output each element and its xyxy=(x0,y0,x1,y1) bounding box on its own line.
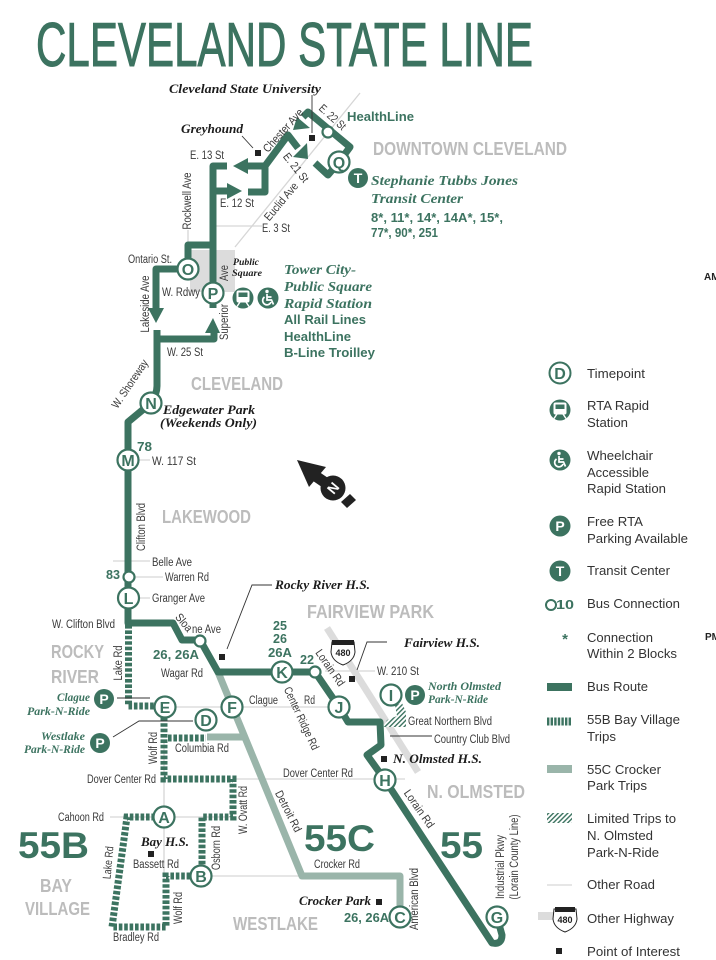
legend: timepoint xyxy=(550,362,645,384)
legend: parking: Parking Available xyxy=(587,531,688,546)
timepoint stops: O xyxy=(182,262,194,279)
downtown labels: E. 12 St xyxy=(220,198,255,210)
legend: 55B trips: 55B Bay Village xyxy=(587,712,680,727)
west side road labels: Wolf Rd xyxy=(148,732,160,764)
west side road labels: Park-N-Ride xyxy=(24,742,86,756)
east side road labels: Lorain Rd xyxy=(312,648,346,689)
timepoint stops: F xyxy=(227,700,237,717)
Tower City rapid station text: B-Line Troilley xyxy=(284,346,375,360)
north arrow: N xyxy=(324,479,342,497)
downtown labels: Ave xyxy=(219,265,231,281)
legend: connection within 2 blocks xyxy=(562,630,677,661)
legend: 55B trips xyxy=(547,712,680,744)
route numbers: 55B xyxy=(18,825,89,866)
east side road labels: Industrial Pkwy xyxy=(495,835,507,899)
bus connection circles xyxy=(124,126,334,678)
east side road labels: North Olmsted xyxy=(427,679,502,693)
east side road labels xyxy=(268,619,521,930)
legend: RTA rapid station: Station xyxy=(587,415,628,430)
Stephanie Tubbs Jones transit center text: Transit Center xyxy=(371,191,464,206)
downtown labels: DOWNTOWN CLEVELAND xyxy=(373,138,567,159)
downtown labels: Rockwell Ave xyxy=(182,172,194,230)
east side road labels: 25 xyxy=(273,619,287,633)
east side road labels: 22 xyxy=(300,653,314,667)
legend: limited trips xyxy=(547,811,676,860)
icon: parking Westlake xyxy=(90,733,110,753)
downtown labels xyxy=(110,82,567,411)
legend: parking xyxy=(550,514,688,546)
legend: connection within 2 blocks: Within 2 Blocks xyxy=(587,646,677,661)
legend: connection within 2 blocks: * xyxy=(562,631,568,648)
mid corridor labels: 78 xyxy=(137,440,152,454)
west side road labels: Lake Rd xyxy=(102,846,116,880)
timepoint stops: I xyxy=(389,688,393,705)
community names: VILLAGE xyxy=(25,898,90,919)
legend: limited trips: N. Olmsted xyxy=(587,828,653,843)
east side road labels: Country Club Blvd xyxy=(434,734,510,746)
legend: other road: Other Road xyxy=(587,877,655,892)
interstate 480 shield xyxy=(331,640,355,665)
legend: bus route xyxy=(547,679,648,694)
downtown labels: Superior xyxy=(219,304,231,340)
legend: other highway: Other Highway xyxy=(587,911,675,926)
route 55C Crocker Park trips xyxy=(207,672,400,917)
timepoint stops: P xyxy=(208,286,219,303)
community names: LAKEWOOD xyxy=(162,506,251,527)
legend xyxy=(538,362,688,959)
timepoint stops: C xyxy=(394,910,406,927)
mid corridor labels: Edgewater Park xyxy=(162,403,256,417)
west side road labels: W. Ovatt Rd xyxy=(238,786,250,834)
timepoint stops xyxy=(118,152,508,928)
background roads and highway xyxy=(110,93,418,880)
west side road labels: Columbia Rd xyxy=(175,743,229,755)
Stephanie Tubbs Jones transit center text xyxy=(371,173,518,240)
legend: wheelchair accessible: Wheelchair xyxy=(587,448,654,463)
timepoint stops: D xyxy=(200,713,212,730)
timepoint stops: H xyxy=(379,773,391,790)
legend: limited trips: Limited Trips to xyxy=(587,811,676,826)
east side road labels: N. Olmsted H.S. xyxy=(392,752,482,766)
west side road labels: Park-N-Ride xyxy=(27,704,91,718)
timepoint stops: E xyxy=(160,700,171,717)
east side road labels: Park-N-Ride xyxy=(428,692,489,706)
downtown labels: W. Shoreway xyxy=(110,358,151,411)
icon: parking I xyxy=(405,685,425,705)
community names: WESTLAKE xyxy=(233,913,318,934)
Tower City rapid station text xyxy=(283,263,375,360)
route numbers: 55 xyxy=(440,825,483,866)
legend: wheelchair accessible: Rapid Station xyxy=(587,481,666,496)
west side road labels: Clague xyxy=(57,690,91,704)
west side road labels: Clague xyxy=(249,695,278,707)
east side road labels: (Lorain County Line) xyxy=(509,814,521,900)
legend: other road xyxy=(547,877,655,892)
icon: rapid station xyxy=(232,288,254,308)
downtown labels: W. Rdwy xyxy=(162,287,200,299)
downtown labels: E. 13 St xyxy=(190,150,225,162)
Tower City rapid station text: Tower City- xyxy=(284,263,356,278)
west side road labels: Bradley Rd xyxy=(113,932,159,944)
Tower City rapid station text: All Rail Lines xyxy=(284,313,366,327)
legend: parking: P xyxy=(555,518,565,534)
community names: BAY xyxy=(40,875,73,896)
legend: transit center: Transit Center xyxy=(587,563,671,578)
community names: N. OLMSTED xyxy=(427,781,525,802)
icon: parking I: P xyxy=(410,687,420,703)
west side road labels: Wolf Rd xyxy=(173,892,185,924)
route 55 main bus route xyxy=(128,112,502,943)
downtown labels: Cleveland State University xyxy=(169,82,321,96)
timepoint stops: K xyxy=(276,665,288,682)
east side road labels: Fairview H.S. xyxy=(403,636,480,650)
community names xyxy=(25,373,525,934)
legend: 55B trips: Trips xyxy=(587,729,617,744)
downtown labels: E. 3 St xyxy=(262,223,291,235)
Stephanie Tubbs Jones transit center text: 8*, 11*, 14*, 14A*, 15*, xyxy=(371,211,503,225)
clipped edge labels xyxy=(704,272,716,643)
mid corridor labels: Clifton Blvd xyxy=(136,503,148,551)
timepoint stops: L xyxy=(124,591,134,608)
west side road labels: Cahoon Rd xyxy=(58,812,104,824)
east side road labels: Lorain Rd xyxy=(401,788,436,831)
points of interest squares and leaders xyxy=(113,95,432,905)
legend: RTA rapid station xyxy=(550,398,649,430)
mid corridor labels: W. Clifton Blvd xyxy=(52,619,115,631)
legend: wheelchair accessible xyxy=(550,448,666,496)
west side road labels: Osborn Rd xyxy=(211,826,223,870)
legend: connection within 2 blocks: Connection xyxy=(587,630,653,645)
east side road labels: 26 xyxy=(273,632,287,646)
legend: 55C trips: 55C Crocker xyxy=(587,762,662,777)
east side road labels: American Blvd xyxy=(409,868,421,930)
downtown labels: E. 21 St xyxy=(280,151,311,186)
Stephanie Tubbs Jones transit center text: 77*, 90*, 251 xyxy=(371,226,438,240)
west side road labels: Dover Center Rd xyxy=(87,774,156,786)
legend: other highway: 480 xyxy=(557,915,573,925)
legend: other highway xyxy=(538,907,675,932)
legend: parking: Free RTA xyxy=(587,514,643,529)
downtown labels: W. 25 St xyxy=(167,347,204,359)
community names: ROCKY xyxy=(51,641,105,662)
timepoint stops: A xyxy=(158,810,170,827)
legend: 55C trips xyxy=(547,762,662,793)
route numbers: 55C xyxy=(304,818,375,859)
icon: transit center T xyxy=(348,168,368,188)
legend: wheelchair accessible: Accessible xyxy=(587,465,649,480)
Stephanie Tubbs Jones transit center text: Stephanie Tubbs Jones xyxy=(371,173,518,188)
west side road labels: Bassett Rd xyxy=(133,859,179,871)
east side road labels: Dover Center Rd xyxy=(283,768,353,780)
Tower City rapid station text: Public Square xyxy=(284,280,372,295)
mid corridor labels xyxy=(52,403,370,631)
route numbers xyxy=(18,818,483,866)
route direction arrows xyxy=(148,117,310,333)
icon: transit center T: T xyxy=(354,170,363,186)
east side road labels: Center Ridge Rd xyxy=(281,685,321,752)
downtown labels: Chester Ave xyxy=(261,107,306,155)
downtown labels: Square xyxy=(232,269,263,279)
route 55B Bay Village trips xyxy=(112,625,233,927)
Tower City rapid station text: Rapid Station xyxy=(283,297,372,312)
downtown labels: Lakeside Ave xyxy=(140,276,152,332)
legend: point of interest: Point of Interest xyxy=(587,944,680,959)
community names: RIVER xyxy=(51,666,99,687)
mid corridor labels: (Weekends Only) xyxy=(160,416,257,430)
interstate 480 shield: 480 xyxy=(335,648,351,658)
legend: transit center: T xyxy=(556,563,565,579)
Tower City rapid station text: HealthLine xyxy=(284,330,351,344)
north arrow xyxy=(297,460,356,508)
community names: FAIRVIEW PARK xyxy=(307,601,435,622)
mid corridor labels: Belle Ave xyxy=(152,557,192,569)
timepoint stops: N xyxy=(145,396,157,413)
icon: parking Clague xyxy=(94,689,114,709)
legend: RTA rapid station: RTA Rapid xyxy=(587,398,649,413)
timepoint stops: B xyxy=(195,869,207,886)
mid corridor labels: Warren Rd xyxy=(165,572,209,584)
east side road labels: W. 210 St xyxy=(377,666,420,678)
downtown labels: Ontario St. xyxy=(128,254,172,266)
downtown labels: Greyhound xyxy=(181,122,244,136)
east side road labels: 26A xyxy=(268,646,292,660)
legend: timepoint: Timepoint xyxy=(587,366,645,381)
west side road labels: 26, 26A xyxy=(153,648,199,662)
west side road labels: Westlake xyxy=(41,729,86,743)
timepoint stops: G xyxy=(491,910,503,927)
east side road labels: 26, 26A xyxy=(344,911,389,925)
west side road labels: Wagar Rd xyxy=(161,668,203,680)
west side road labels: Detroit Rd xyxy=(272,789,303,834)
timepoint stops: Q xyxy=(333,155,345,172)
legend: 55C trips: Park Trips xyxy=(587,778,648,793)
timepoint stops: J xyxy=(335,700,343,717)
icon: parking Westlake: P xyxy=(95,735,105,751)
downtown labels: Euclid Ave xyxy=(262,181,301,224)
icon: parking Clague: P xyxy=(99,691,109,707)
east side road labels: Great Northern Blvd xyxy=(408,716,492,728)
legend: bus connection: 10 xyxy=(556,598,574,612)
west side road labels: ne Ave xyxy=(192,624,221,636)
west side road labels: Sloa xyxy=(172,612,195,635)
east side road labels: Crocker Rd xyxy=(314,859,360,871)
downtown labels: HealthLine xyxy=(347,110,414,124)
west side road labels: Bay H.S. xyxy=(140,835,189,849)
east side road labels: Crocker Park xyxy=(299,894,372,908)
legend: bus connection xyxy=(546,596,680,612)
west side road labels: Lake Rd xyxy=(113,646,125,680)
mid corridor labels: W. 117 St xyxy=(152,456,197,468)
limited trips hatched area xyxy=(383,703,406,727)
legend: bus connection: Bus Connection xyxy=(587,596,680,611)
timepoint stops: M xyxy=(121,453,135,470)
legend: transit center xyxy=(550,560,671,582)
icon: wheelchair accessible xyxy=(258,288,278,308)
legend: limited trips: Park-N-Ride xyxy=(587,845,659,860)
mid corridor labels: 83 xyxy=(106,568,120,582)
mid corridor labels: Rocky River H.S. xyxy=(274,578,370,592)
legend: bus route: Bus Route xyxy=(587,679,648,694)
west side road labels: Rd xyxy=(304,695,315,707)
community names: CLEVELAND xyxy=(191,373,283,394)
downtown labels: Public xyxy=(233,258,260,268)
mid corridor labels: Granger Ave xyxy=(152,593,205,605)
west side road labels xyxy=(24,612,315,944)
downtown labels: E. 22 St xyxy=(316,103,348,133)
legend: timepoint: D xyxy=(554,366,566,383)
